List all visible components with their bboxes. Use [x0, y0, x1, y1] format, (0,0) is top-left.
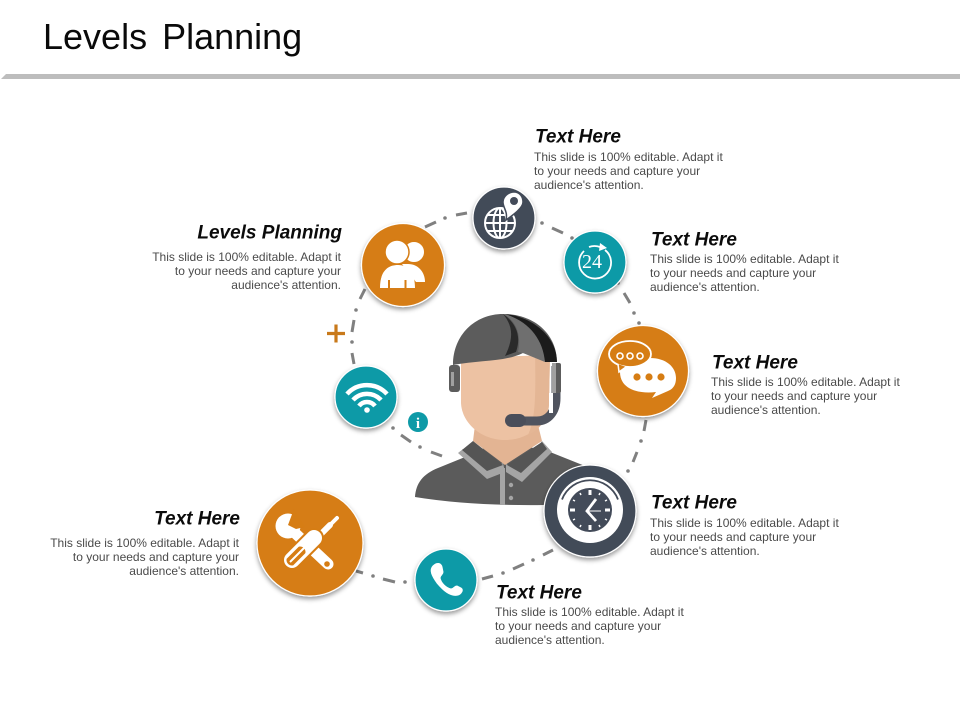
text block: right: Text Here [712, 352, 798, 374]
text block: levels planning: Levels Planning [197, 222, 342, 244]
icon: plus sign [327, 324, 345, 342]
icon: wifi [335, 366, 397, 428]
icon: globe with location pin [473, 187, 535, 249]
collar [458, 441, 552, 482]
text block: bottom [495, 582, 684, 647]
text block: upper right: audience's attention. [650, 280, 760, 294]
icon: clock [544, 465, 636, 557]
hair [453, 314, 557, 365]
central person with headset [415, 314, 590, 505]
icon: telephone [415, 549, 477, 611]
text block: upper right: Text Here [651, 230, 737, 250]
text block: lower left: audience's attention. [129, 564, 239, 578]
text block: lower right: This slide is 100% editable. Adapt it [650, 516, 839, 530]
neck [473, 425, 542, 465]
text block: right: audience's attention. [711, 403, 821, 417]
text block: lower left [50, 508, 240, 578]
text block: lower right: audience's attention. [650, 544, 760, 558]
text block: bottom: This slide is 100% editable. Adapt it [495, 605, 684, 619]
title: Levels Planning [43, 16, 302, 57]
shirt placket and buttons [500, 468, 505, 505]
text block: levels planning [152, 222, 342, 292]
microphone [505, 414, 526, 427]
text block: lower right [650, 492, 839, 558]
text block: top: audience's attention. [534, 178, 644, 192]
text block: lower left: to your needs and capture your [73, 550, 239, 564]
text block: upper right: to your needs and capture your [650, 266, 816, 280]
text block: lower left: Text Here [154, 508, 240, 530]
text block: upper right: This slide is 100% editable. Adapt it [650, 252, 839, 266]
icon: info badge [408, 412, 428, 432]
text block: top: to your needs and capture your [534, 164, 700, 178]
text block: right: This slide is 100% editable. Adapt it [711, 375, 900, 389]
dashed ring [350, 213, 646, 584]
icon: people [362, 224, 444, 306]
text block: right [711, 352, 900, 417]
icon: 24 hours: 24 [582, 251, 602, 273]
text block: levels planning: This slide is 100% editable. Adapt it [152, 250, 342, 264]
icon: info badge: i [416, 416, 420, 432]
text block: bottom: audience's attention. [495, 633, 605, 647]
text block: bottom: to your needs and capture your [495, 619, 661, 633]
header rule [1, 74, 960, 79]
text block: lower right: Text Here [651, 492, 737, 514]
text block: levels planning: to your needs and capture your [175, 264, 341, 278]
text block: top [534, 126, 723, 192]
text block: lower left: This slide is 100% editable. Adapt it [50, 536, 240, 550]
face [461, 355, 550, 440]
text block: levels planning: audience's attention. [231, 278, 341, 292]
text block: bottom: Text Here [496, 582, 582, 604]
shirt [415, 440, 590, 505]
text block: top: This slide is 100% editable. Adapt it [534, 150, 723, 164]
icon: chat bubbles [598, 326, 688, 416]
text block: right: to your needs and capture your [711, 389, 877, 403]
text block: lower right: to your needs and capture your [650, 530, 816, 544]
icon: wrench and screwdriver [257, 490, 363, 596]
ear pad [449, 365, 460, 392]
icon: 24 hours [564, 231, 626, 293]
text block: top: Text Here [535, 126, 621, 148]
text block: upper right [650, 230, 839, 294]
headset boom [512, 366, 556, 421]
